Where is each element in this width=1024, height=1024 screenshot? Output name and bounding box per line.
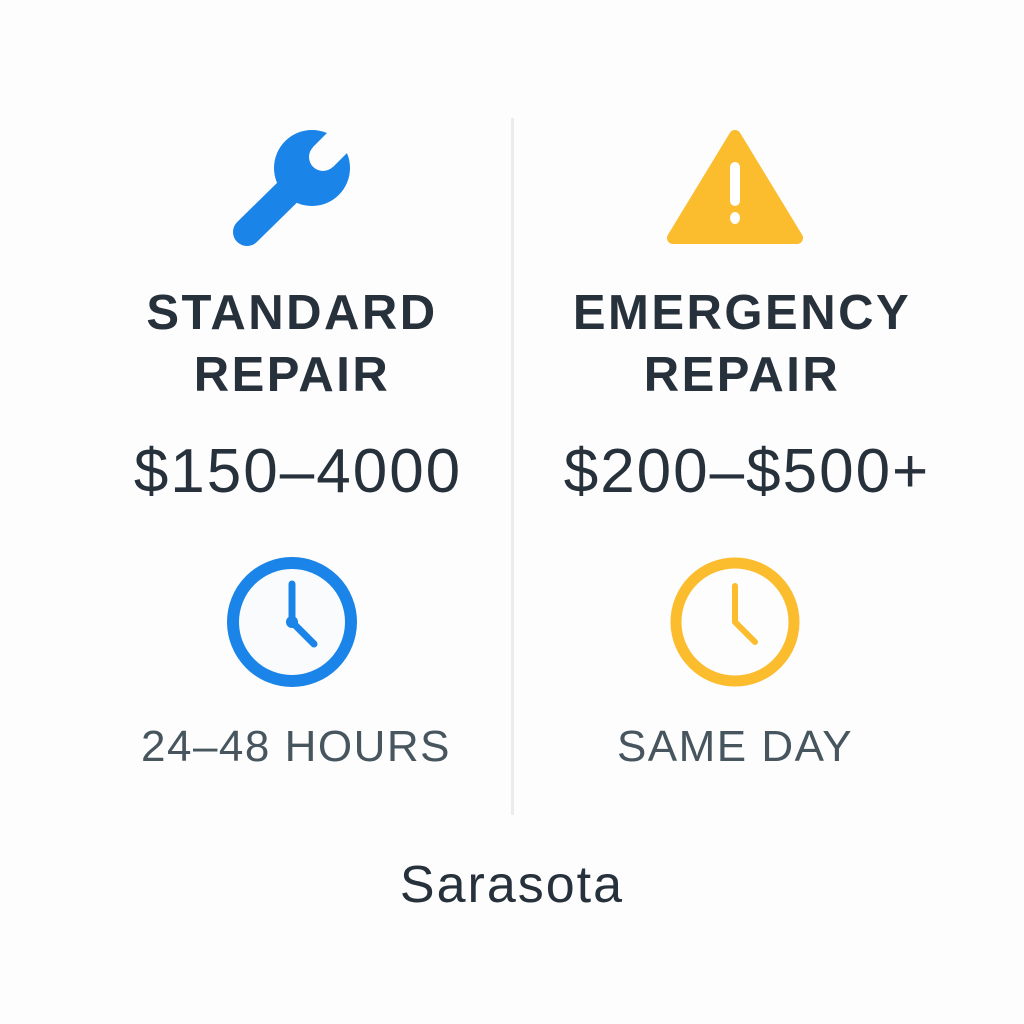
heading: standard repair: REPAIR [194, 348, 390, 402]
time: emergency: SAME DAY [617, 722, 853, 771]
divider [511, 118, 514, 815]
heading: emergency repair [573, 286, 911, 402]
footer: location: Sarasota [400, 856, 624, 914]
heading: standard repair [146, 286, 438, 402]
heading: emergency repair: EMERGENCY [573, 286, 911, 340]
time: standard: 24–48 HOURS [141, 722, 451, 771]
price: emergency: $200–$500+ [564, 437, 930, 506]
heading: standard repair: STANDARD [146, 286, 438, 340]
icon: blue clock [227, 557, 357, 687]
icon: yellow clock [670, 558, 800, 686]
price: standard: $150–4000 [134, 437, 462, 506]
heading: emergency repair: REPAIR [644, 348, 840, 402]
